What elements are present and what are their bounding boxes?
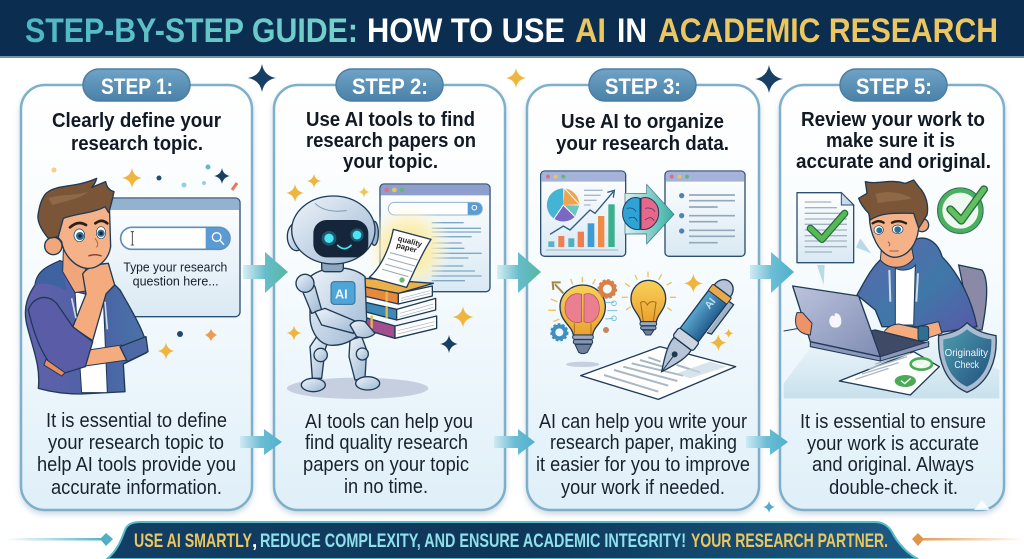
arrow: step 2 to 3 (bottom) (494, 429, 535, 455)
step 5 heading (796, 109, 991, 173)
step 1 body text: help AI tools provide you (37, 454, 236, 476)
footer banner: , (252, 531, 257, 552)
step 5 heading: accurate and original. (796, 151, 991, 173)
robot (287, 196, 428, 399)
step 3 body text: research paper, making (550, 432, 737, 454)
step 2 body text: AI tools can help you (305, 411, 473, 433)
step 1 badge (83, 69, 190, 101)
step 2 heading: your topic. (343, 151, 438, 173)
fountain pen (652, 274, 743, 382)
title banner: HOW TO USE (367, 12, 565, 50)
fountain pen: AI (702, 296, 719, 312)
right connector line (912, 533, 1024, 546)
step 5 body text: It is essential to ensure (800, 411, 986, 433)
step 3 heading: Use AI to organize (561, 111, 724, 133)
step 1 body text: It is essential to define (46, 410, 227, 432)
laptop (784, 286, 929, 361)
step 2 badge (336, 69, 443, 101)
title banner: AI (575, 12, 606, 50)
footer banner: REDUCE COMPLEXITY, AND ENSURE ACADEMIC INTEGRITY! (260, 531, 686, 552)
step 2 body text: in no time. (344, 476, 428, 498)
stack of books (351, 278, 437, 338)
arrow: step 3 to 5 (top) (750, 252, 794, 293)
illustration: student reviewing work on a laptop (784, 180, 999, 398)
footer banner (5, 522, 1024, 559)
left connector line (5, 533, 113, 546)
glow (365, 205, 452, 292)
arrow: step 3 to 5 (bottom) (746, 429, 788, 455)
step 1 heading (52, 110, 221, 155)
step 1 heading: Clearly define your (52, 110, 221, 132)
student figure (25, 178, 148, 394)
step 5 heading: make sure it is (826, 130, 955, 152)
step 1 badge: STEP 1: (101, 74, 173, 99)
panel: step 3 (527, 69, 759, 510)
student figure (857, 180, 987, 343)
step 2 body text: papers on your topic (303, 454, 469, 476)
arrow: step 2 to 3 (top) (497, 252, 541, 293)
panel: step 2 (274, 69, 505, 510)
arrow: step 1 to 2 (bottom) (240, 429, 282, 455)
step 2 heading (306, 109, 476, 173)
step 1 sparkles (52, 164, 237, 360)
arrow with brain (623, 184, 674, 244)
step 2 heading: research papers on (306, 130, 476, 152)
sparkles (684, 274, 733, 351)
green check badge (938, 188, 984, 233)
brain lightbulb with gears (548, 277, 617, 367)
step 3 badge (589, 69, 696, 101)
step 3 heading (556, 111, 729, 155)
shield: originality check (939, 323, 996, 392)
step 3 body text: your work if needed. (561, 477, 725, 499)
step 3 badge: STEP 3: (605, 74, 681, 99)
decorative stars (248, 64, 990, 513)
paper sheet (581, 347, 736, 399)
search window: Type your research (123, 261, 227, 275)
browser window (380, 184, 490, 292)
search window (87, 198, 240, 317)
step 2 heading: Use AI tools to find (306, 109, 475, 131)
step 5 badge: STEP 5: (856, 74, 932, 99)
title banner: STEP-BY-STEP GUIDE: (25, 12, 358, 50)
paper: quality paper: quality (397, 234, 424, 249)
step 3 body text: it easier for you to improve (536, 454, 750, 476)
desk (784, 337, 999, 398)
step 2 badge: STEP 2: (352, 74, 428, 99)
illustration: data to organized notes and writing (541, 171, 745, 399)
title banner: IN (617, 12, 647, 50)
step 1 body text: your research topic to (48, 432, 224, 454)
step 5 badge (840, 69, 947, 101)
footer banner: USE AI SMARTLY (134, 531, 252, 552)
notes window (665, 171, 745, 256)
chart window (541, 171, 626, 256)
footer banner: YOUR RESEARCH PARTNER. (691, 531, 888, 552)
illustration: robot with books and paper (287, 184, 490, 399)
robot: AI (335, 287, 348, 301)
panel: step 5 (780, 69, 1004, 510)
step 1 body text: accurate information. (51, 477, 222, 499)
step 2 body text: find quality research (305, 432, 468, 454)
shield: originality check: Check (954, 360, 979, 371)
shield: originality check: Originality (945, 348, 988, 359)
step 5 body text: your work is accurate (807, 433, 979, 455)
step 3 body text (536, 411, 750, 499)
step 2 body text (303, 411, 473, 498)
paper: quality paper: paper (395, 241, 418, 255)
panel: step 1 (21, 69, 252, 510)
step 3 heading: your research data. (556, 133, 729, 155)
step 5 body text (800, 411, 986, 499)
step 5 heading: Review your work to (801, 109, 985, 131)
lightbulb (622, 272, 676, 335)
search window: question here... (133, 275, 219, 289)
title banner (0, 0, 1024, 58)
illustration: student thinking at a search window (25, 178, 240, 394)
document with check (797, 193, 871, 285)
arrow: step 1 to 2 (top) (243, 252, 288, 293)
step 2 sparkles (286, 174, 474, 353)
paper: quality paper (369, 229, 431, 287)
step 3 body text: AI can help you write your (539, 411, 747, 433)
step 5 body text: double-check it. (829, 477, 958, 499)
reviewed papers (839, 352, 939, 395)
step 5 body text: and original. Always (812, 454, 974, 476)
step 1 heading: research topic. (71, 133, 203, 155)
step 1 body text (37, 410, 236, 499)
